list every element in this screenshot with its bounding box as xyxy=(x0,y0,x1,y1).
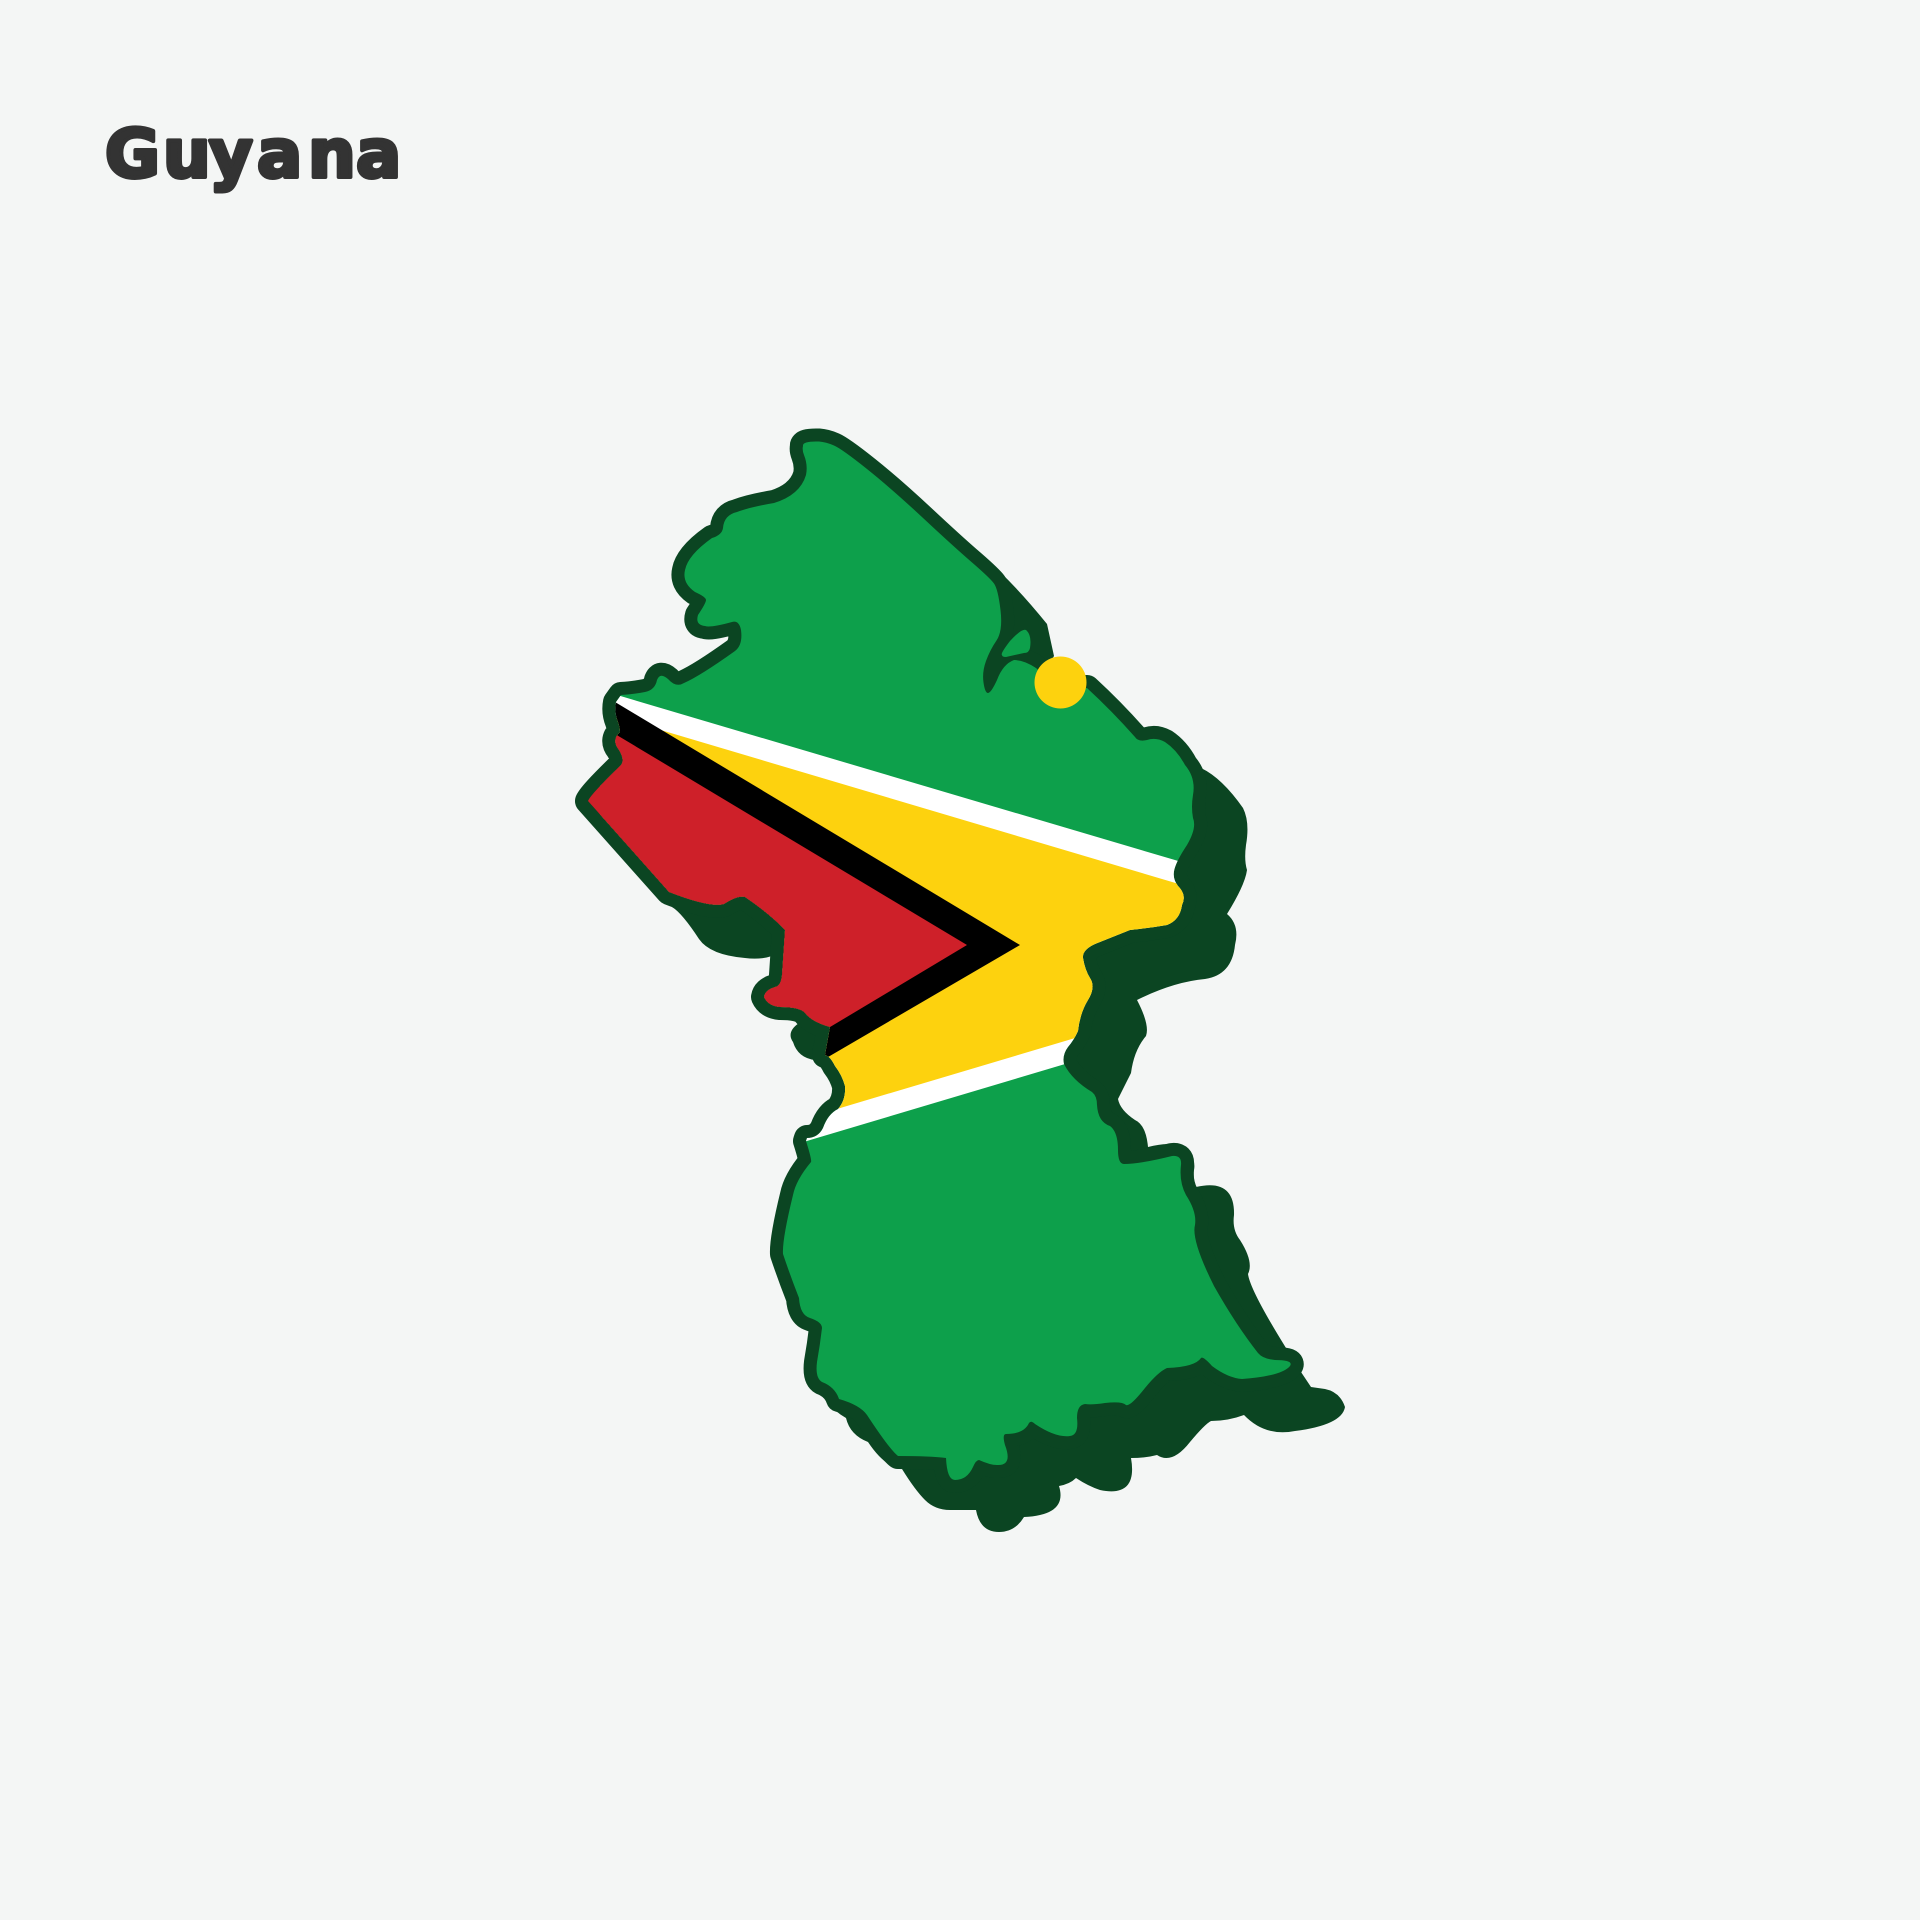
white band xyxy=(600,696,1184,1142)
title: G xyxy=(105,115,160,193)
yellow arrowhead xyxy=(600,717,1184,1109)
title: a xyxy=(257,115,302,193)
title: a xyxy=(356,115,401,193)
flag colours clipped to the country shape xyxy=(588,442,1291,1480)
lake xyxy=(1002,630,1030,657)
map of Guyana with flag fill xyxy=(540,420,1360,1532)
red triangle xyxy=(588,735,967,1027)
country outline xyxy=(588,441,1291,1480)
title: n xyxy=(308,115,356,193)
black fimbriation xyxy=(588,702,1020,1057)
title: u xyxy=(163,115,211,193)
dark green drop shadow xyxy=(672,549,1345,1532)
green field xyxy=(588,442,1291,1480)
yellow circle xyxy=(1034,656,1086,708)
title: y xyxy=(209,115,253,193)
